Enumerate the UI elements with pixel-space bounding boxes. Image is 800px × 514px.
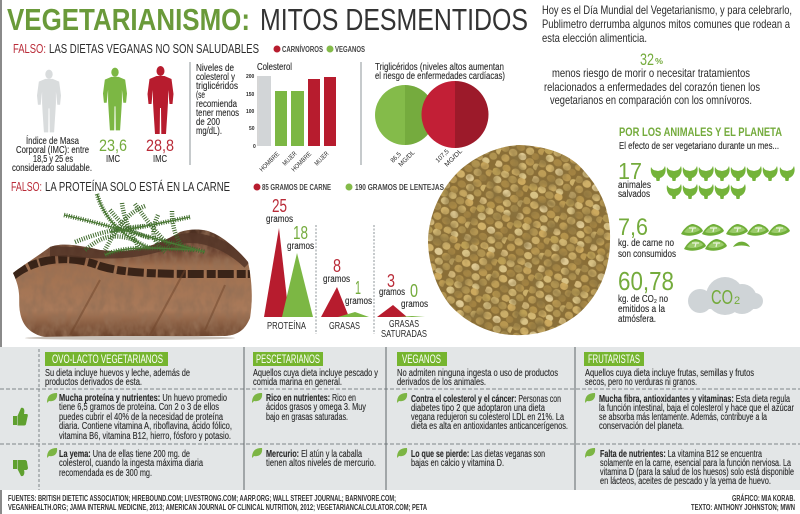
legend: carnivoros veganos: CARNÍVOROS [282, 45, 323, 54]
icon: thumbs up [13, 408, 28, 426]
chart: fat triangles: gramos [345, 296, 372, 307]
bar chart: cholesterol: MUJER [313, 150, 331, 167]
chart: fat triangles: 1 [355, 278, 361, 298]
chart: protein triangles: gramos [287, 241, 314, 252]
legend: carne lentejas [254, 183, 445, 192]
intro text: esta elección alimenticia. [542, 31, 647, 45]
heading: falso dietas veganas: LAS DIETAS VEGANAS NO SON SALUDABLES [49, 41, 259, 56]
text: IMC definition: considerado saludable. [12, 163, 92, 174]
column: ovo-lacto vegetarianos: colesterol, cuando la ingesta máxima diaria [59, 458, 203, 469]
column: veganos: Lo que se pierde: Las dietas veganas son [411, 449, 545, 460]
legend: carnivoros veganos: VEGANOS [335, 45, 365, 54]
text: cholesterol levels note: recomienda [196, 99, 237, 110]
chart: triglycerides circles: Triglicéridos (niveles altos aumentan [375, 62, 504, 73]
bar chart: cholesterol: 0 [253, 144, 256, 150]
callout: 32%: menos riesgo de morir o necesitar tratamientos [552, 66, 750, 80]
bar chart: cholesterol [246, 62, 336, 173]
chart: saturated fat triangles: GRASAS [389, 318, 419, 330]
column: frutaristas [584, 352, 794, 487]
column: ovo-lacto vegetarianos: recomendada es de 300 mg. [59, 468, 152, 479]
bar chart: cholesterol: 150 [246, 92, 255, 98]
chart: triglycerides circles [375, 62, 505, 168]
bar chart: cholesterol: HOMBRE [258, 150, 282, 173]
column: ovo-lacto vegetarianos: La yema: Una de ellas tiene 200 mg. de [59, 449, 190, 460]
text: cholesterol levels note [196, 63, 239, 137]
stat: 7,6 kg of meat: 7,6 [618, 214, 648, 241]
column: frutaristas: conservación del planeta. [599, 421, 684, 432]
chart: saturated fat triangles: gramos [379, 287, 405, 298]
text: cholesterol levels note: mg/dL). [196, 126, 222, 137]
chart: saturated fat triangles: 3 [387, 271, 395, 291]
chart: fat triangles: 8 [333, 256, 341, 276]
chart: fat triangles: GRASAS [329, 320, 360, 332]
legend: carnivoros veganos [274, 45, 365, 54]
title [7, 2, 528, 37]
icon: red body figure [148, 66, 174, 134]
bar chart: cholesterol: 100 [246, 109, 255, 115]
bar chart: cholesterol: 50 [249, 126, 255, 132]
callout: 32%: 32 [640, 50, 654, 69]
panel: diet types table [0, 347, 800, 490]
chart: triglycerides circles: MG/DL [443, 148, 464, 168]
column: ovo-lacto vegetarianos: diaria. Contiene vitamina A, riboflavina, ácido fólico, [59, 421, 232, 432]
stat: 60,78 kg CO2 [618, 266, 674, 325]
bar chart: cholesterol: MUJER [281, 150, 299, 167]
icon: CO2 cloud [688, 277, 763, 315]
footer: sources [8, 494, 427, 512]
text: cholesterol levels note: (se [196, 90, 205, 101]
chart: protein triangles: 25 [272, 196, 287, 216]
icon: CO2 cloud: CO [711, 287, 733, 309]
column: veganos: VEGANOS [402, 354, 441, 366]
column: pescetarianos: Aquellos cuya dieta incluye pescado y [253, 368, 378, 379]
icons: steaks [681, 224, 790, 251]
stat: 60,78 kg CO2: kg. de CO₂ no [618, 294, 668, 305]
text: cholesterol levels note: Niveles de [196, 63, 234, 74]
stat: 7,6 kg of meat: son consumidos [618, 249, 676, 260]
icon: thumbs down [13, 460, 28, 476]
column: pescetarianos: bajo en grasas saturadas. [266, 412, 348, 423]
footer: sources: FUENTES: BRITISH DIETETIC ASSOCIATION; HIREBOUND.COM; LIVESTRONG.COM; AARP.ORG; WALL STREET JOURNAL; BARNIVORE.COM; [8, 494, 396, 503]
text: IMC definition: Índice de Masa [26, 134, 79, 147]
bar chart: cholesterol: 200 [246, 74, 255, 80]
column: ovo-lacto vegetarianos: productos derivados de esta. [45, 377, 142, 388]
stat: carnivore IMC [146, 136, 174, 165]
stat: 17 animals saved: 17 [618, 158, 642, 184]
column: pescetarianos: comida marina en general. [253, 377, 342, 388]
chart: protein triangles: 18 [293, 223, 308, 243]
stat: 7,6 kg of meat: kg. de carne no [618, 238, 674, 249]
heading: falso proteina: LA PROTEÍNA SOLO ESTÁ EN LA CARNE [45, 179, 230, 194]
column: ovo-lacto vegetarianos: puedes cubrir el 40% de la necesidad de proteína [59, 412, 223, 423]
chart: saturated fat triangles: SATURADAS [381, 328, 427, 340]
bar chart: cholesterol: Colesterol [257, 62, 292, 73]
stat: 17 animals saved: animales [618, 180, 651, 191]
bar chart: cholesterol: HOMBRE [290, 150, 314, 173]
stat: 7,6 kg of meat [618, 214, 676, 260]
chart: fat triangles: gramos [323, 274, 350, 285]
column: frutaristas: secos, pero no verduras ni granos. [585, 377, 697, 388]
callout: 32%: % [655, 57, 663, 66]
stat: vegan IMC: IMC [106, 154, 120, 165]
heading: falso proteina [11, 179, 230, 194]
title: MITOS DESMENTIDOS [260, 2, 528, 37]
chart: triglycerides circles: MG/DL [397, 149, 417, 168]
icon: CO2 cloud: 2 [734, 295, 740, 307]
stat: 17 animals saved [618, 158, 651, 200]
chart: protein triangles: PROTEÍNA [267, 319, 306, 332]
text: IMC definition [12, 134, 92, 174]
heading: falso dietas veganas: FALSO: [13, 41, 46, 56]
column: ovo-lacto vegetarianos: tiene 6,5 gramos de proteína. Con 2 o 3 de ellos [59, 402, 219, 413]
chart: fat triangles [321, 256, 372, 332]
column: pescetarianos: PESCETARIANOS [256, 354, 320, 366]
stat: carnivore IMC: IMC [153, 154, 167, 165]
title: VEGETARIANISMO: [7, 2, 250, 37]
footer: credits [691, 494, 795, 512]
column: ovo-lacto vegetarianos: vitamina B6, vitamina B12, hierro, fósforo y potasio. [59, 431, 231, 442]
image: lentils pile [425, 142, 615, 338]
intro text [542, 3, 792, 45]
icon: grey body figure [37, 70, 61, 132]
callout: 32% [544, 50, 760, 107]
heading: por los animales y el planeta [619, 125, 782, 152]
column: ovo-lacto vegetarianos [45, 352, 232, 479]
column: veganos: vegana redujeron su colesterol LDL en 21%. La [411, 412, 564, 423]
chart: protein triangles: gramos [266, 214, 293, 225]
footer: sources: VEGANHEALTH.ORG; JAMA INTERNAL MEDICINE, 2013; AMERICAN JOURNAL OF CLINICAL NUTRITION, 2012; VEGETARIANCALCULATOR.COM; PETA [8, 503, 427, 512]
column: pescetarianos: Rico en nutrientes: Rico en [266, 393, 356, 404]
chart: saturated fat triangles [377, 271, 428, 340]
image: grilled steak with rosemary [10, 194, 255, 340]
column: frutaristas: Falta de nutrientes: La vitamina B12 se encuentra [600, 449, 762, 460]
column: veganos: derivados de los animales. [397, 377, 486, 388]
column: ovo-lacto vegetarianos: OVO-LACTO VEGETARIANOS [52, 354, 163, 366]
icon: green body figure [103, 68, 127, 130]
legend: carne lentejas: 85 GRAMOS DE CARNE [262, 183, 332, 192]
column: pescetarianos [252, 352, 378, 469]
column: veganos: Contra el colesterol y el cáncer: Personas con [411, 394, 561, 405]
stat: carnivore IMC: 28,8 [146, 136, 174, 155]
column: veganos: dieta es alta en antioxidantes anticancerígenos. [411, 421, 568, 432]
column: veganos [397, 352, 568, 469]
stat: 17 animals saved: salvados [618, 189, 650, 200]
text: cholesterol levels note: colesterol y [196, 72, 235, 83]
text: IMC definition: 18,5 y 25 es [33, 154, 73, 165]
stat: 60,78 kg CO2: 60,78 [618, 266, 674, 296]
column: pescetarianos: ácidos grasos y omega 3. Muy [266, 402, 366, 413]
column: veganos: diabetes tipo 2 que adoptaron una dieta [411, 403, 545, 414]
column: pescetarianos: tienen altos niveles de mercurio. [266, 458, 376, 469]
chart: saturated fat triangles: gramos [401, 299, 428, 310]
chart: saturated fat triangles: 0 [410, 281, 418, 301]
column: ovo-lacto vegetarianos: Su dieta incluye huevos y leche, además de [45, 368, 190, 379]
text: IMC definition: Corporal (IMC): entre [16, 145, 89, 156]
column: ovo-lacto vegetarianos: Mucha proteína y nutrientes: Un huevo promedio [59, 393, 227, 404]
chart: triglycerides circles: el riesgo de enfermedades cardíacas) [375, 71, 505, 82]
icons: chickens [651, 166, 795, 199]
column: pescetarianos: Mercurio: El atún y la caballa [266, 449, 362, 460]
stat: 60,78 kg CO2: atmósfera. [618, 314, 656, 325]
chart: triglycerides circles: 107,5 [434, 148, 451, 164]
column: frutaristas: FRUTARISTAS [588, 354, 640, 366]
chart: protein triangles [264, 196, 314, 332]
chart: triglycerides circles: 86,5 [389, 151, 403, 164]
text: cholesterol levels note: de 200 [196, 117, 220, 128]
text: cholesterol levels note: triglicéridos [196, 81, 238, 92]
heading: falso dietas veganas [13, 41, 259, 56]
column: veganos: No admiten ninguna ingesta o uso de productos [397, 368, 558, 379]
stat: vegan IMC [99, 136, 127, 165]
column: veganos: bajas en calcio y vitamina D. [411, 458, 504, 469]
text: cholesterol levels note: tener menos [196, 108, 239, 119]
legend: carne lentejas: 190 GRAMOS DE LENTEJAS [355, 183, 445, 192]
heading: falso proteina: FALSO: [11, 179, 42, 194]
stat: 60,78 kg CO2: emitidos a la [618, 304, 665, 315]
stat: vegan IMC: 23,6 [99, 136, 127, 155]
